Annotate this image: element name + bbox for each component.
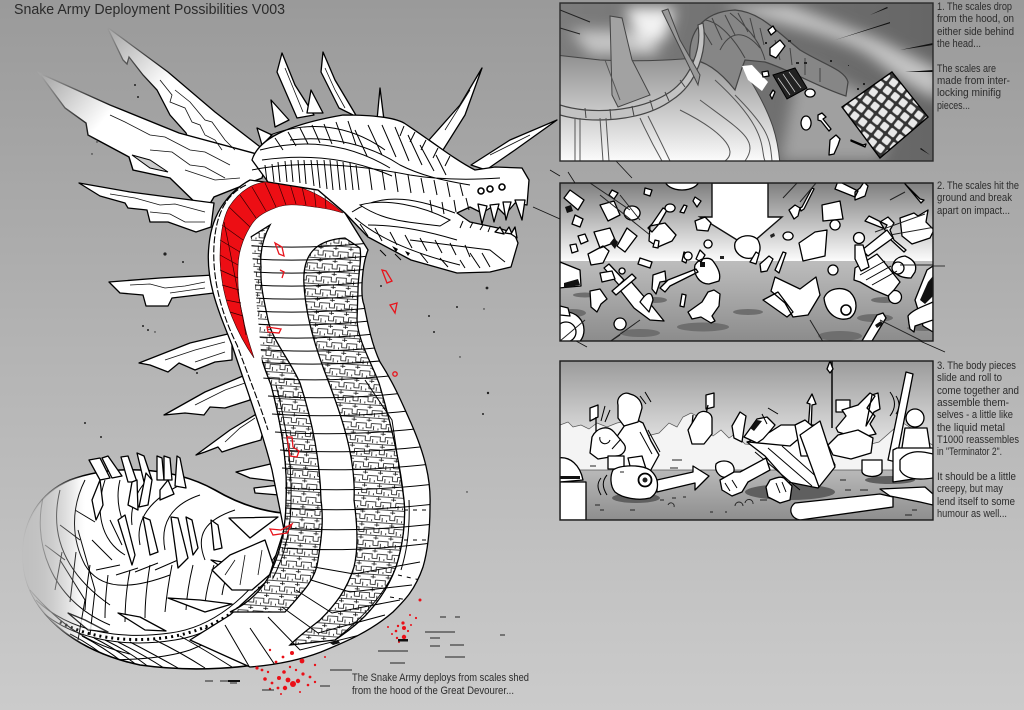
- right box: [893, 448, 933, 482]
- caption: snake army: The Snake Army deploys from scales shed: [352, 672, 529, 684]
- panel 3 caption: selves - a little like: [937, 409, 1013, 421]
- panel 3 caption: the liquid metal: [937, 422, 1005, 434]
- scale maze column inner: [230, 225, 322, 612]
- background crowd: [560, 361, 939, 470]
- panel 1 caption: from the hood, on: [937, 13, 1014, 25]
- shadows: [612, 476, 915, 503]
- central assembling torso: [720, 408, 835, 503]
- storyboard panel 3: [558, 361, 939, 520]
- body coil: [24, 452, 283, 670]
- rolling head and arrow: [598, 466, 709, 499]
- illustration: Great Devourer snake: [10, 27, 557, 695]
- fangs: [460, 200, 525, 238]
- caption: snake army: from the hood of the Great Devourer...: [352, 685, 514, 697]
- shadows: [558, 292, 943, 341]
- panel 1 caption: either side behind: [937, 26, 1014, 38]
- hood ring: [560, 23, 704, 120]
- panel 3 caption: in "Terminator 2".: [937, 446, 1002, 458]
- storyboard panel 2: [548, 170, 943, 350]
- near head: [862, 460, 882, 476]
- flying specks: [84, 84, 489, 493]
- left assembling minifig: [590, 392, 660, 477]
- title: Snake Army Deployment Possibilities V003: [14, 2, 285, 18]
- neck ribs: [222, 240, 435, 668]
- ground marks: [205, 617, 505, 690]
- panel 3 caption: creepy, but may: [937, 483, 1004, 495]
- hammer figure: [854, 230, 900, 296]
- clouds: [570, 5, 940, 100]
- sword: [604, 264, 664, 321]
- panel 1 caption: 1. The scales drop: [937, 1, 1012, 13]
- panel 1 caption: locking minifig: [937, 87, 1001, 99]
- white impact arrow: [700, 183, 782, 243]
- panel 3 caption: slide and roll to: [937, 372, 1002, 384]
- red debris: [255, 598, 422, 695]
- panel 3 caption: humour as well...: [937, 508, 1007, 520]
- small head: [716, 461, 734, 477]
- panel 1 caption: [937, 1, 1014, 112]
- neck body: [190, 180, 435, 668]
- impact lines: [560, 183, 940, 350]
- panel 3 caption: lend itself to some: [937, 496, 1015, 508]
- minifig parts right: [720, 178, 934, 341]
- panel 1 caption: the head...: [937, 38, 981, 50]
- panel 2 caption: ground and break: [937, 192, 1013, 204]
- minifig parts left: [559, 188, 720, 330]
- spine plates: [214, 185, 268, 430]
- red hood scales: [220, 182, 343, 358]
- storyboard panel 1: [556, 3, 940, 165]
- panel 2 caption: [937, 180, 1019, 217]
- debris pieces: [762, 26, 785, 99]
- helmet and box lower left: [558, 458, 586, 520]
- panel 1 caption: The scales are: [937, 63, 996, 75]
- right minifig figure: [828, 392, 899, 459]
- falling minifig head: [735, 236, 760, 258]
- panel 1 caption: made from inter-: [937, 75, 1010, 87]
- large head: [824, 289, 856, 319]
- sword: [791, 487, 933, 520]
- panel 2 caption: apart on impact...: [937, 205, 1010, 217]
- white staff: [888, 372, 913, 462]
- neck and head: [690, 10, 848, 96]
- speed lines: [835, 7, 933, 155]
- panel 1 caption: pieces...: [937, 100, 970, 112]
- spikes: [610, 16, 650, 107]
- corner heads: [548, 312, 584, 348]
- red shed scales: [267, 243, 397, 535]
- ground pebbles: [590, 460, 917, 515]
- leader lines: [533, 161, 945, 352]
- hood spikes: [39, 27, 557, 495]
- panel 3 caption: assemble them-: [937, 397, 1009, 409]
- panel 3 caption: It should be a little: [937, 471, 1016, 483]
- hood body: [556, 55, 780, 165]
- caption: snake army: [352, 672, 529, 697]
- panel 3 caption: [937, 360, 1020, 520]
- scale maze column outer: [290, 238, 405, 645]
- head: [252, 115, 529, 273]
- falling scales: [842, 72, 928, 158]
- coil fade: [25, 476, 82, 644]
